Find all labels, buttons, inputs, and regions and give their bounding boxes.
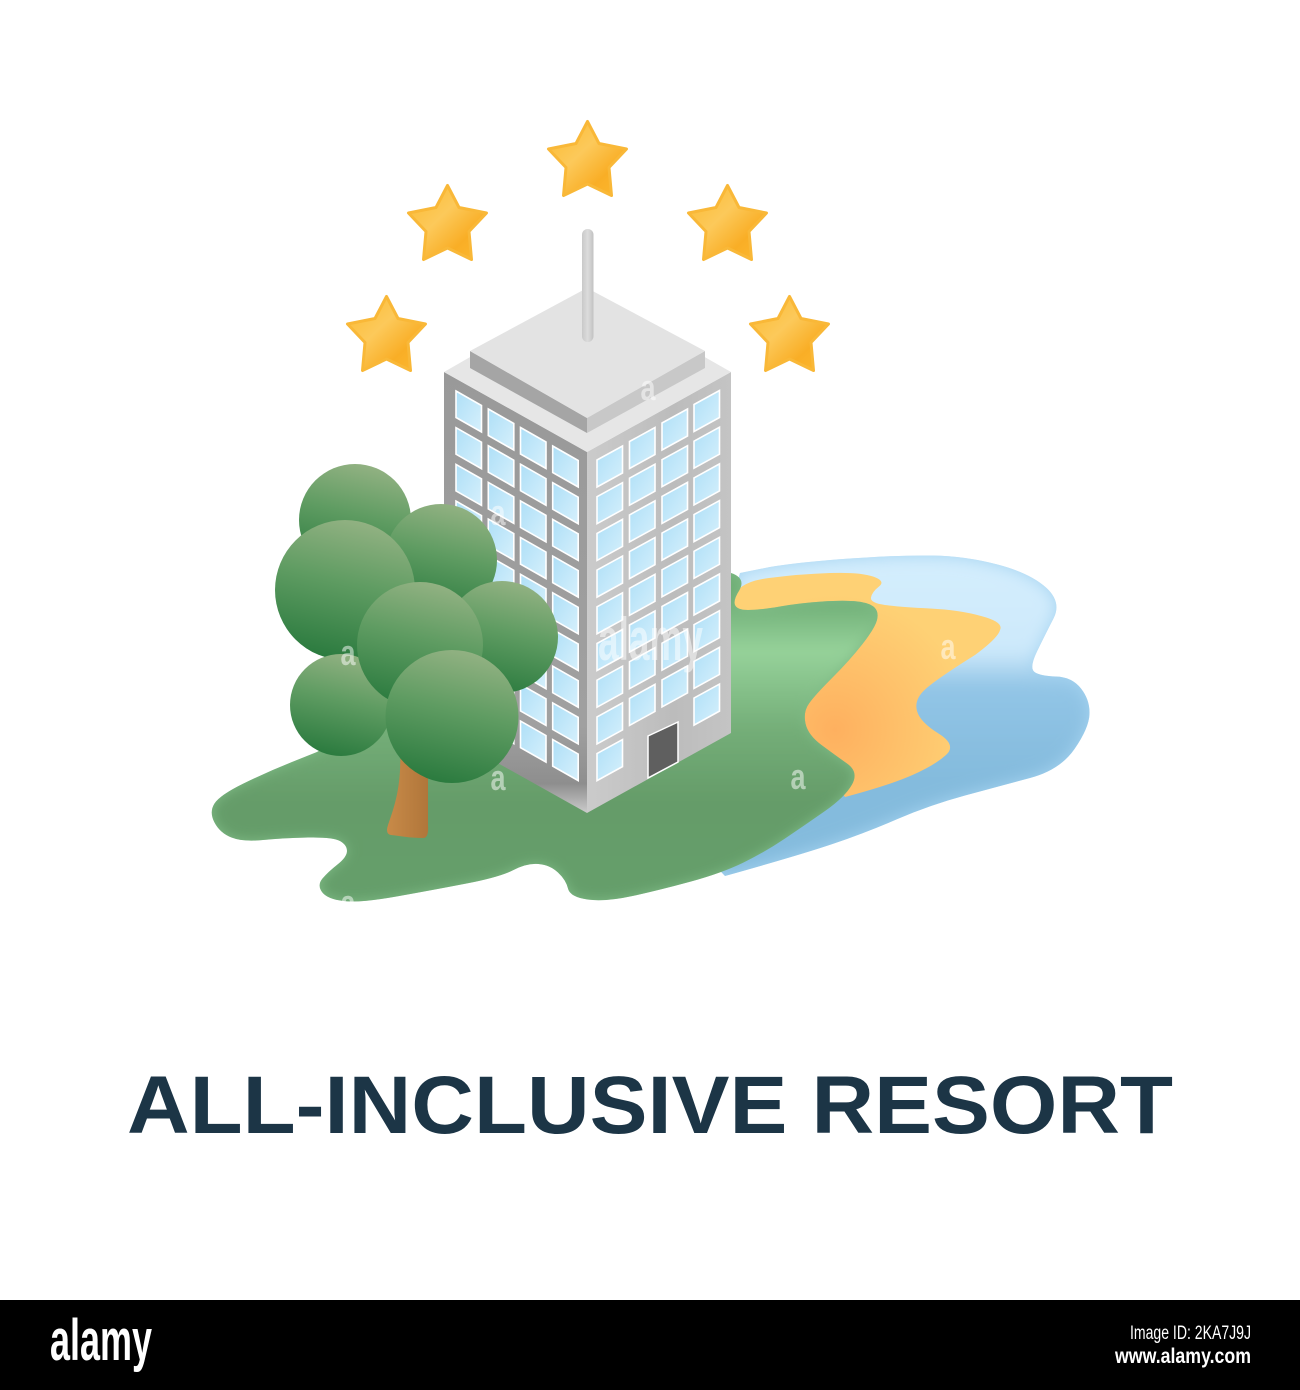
roof block (470, 288, 705, 433)
left windows (456, 391, 578, 781)
foliage (275, 464, 558, 783)
roof (444, 290, 731, 452)
green island (212, 573, 878, 901)
footer logo: alamy (50, 1308, 152, 1373)
title: ALL-INCLUSIVE RESORT (127, 1060, 1173, 1151)
water (700, 555, 1090, 876)
watermarks (340, 367, 956, 923)
building (444, 229, 731, 813)
tree (275, 464, 558, 838)
website: www.alamy.com (1114, 1345, 1251, 1368)
watermarks: a (490, 492, 506, 533)
right face (587, 372, 731, 813)
footer bar (0, 1300, 1300, 1390)
watermarks: a (340, 632, 356, 673)
watermarks: a (340, 882, 356, 923)
star upper right (688, 186, 766, 260)
antenna (582, 229, 594, 342)
image id: Image ID: 2KA7J9J (1130, 1323, 1251, 1344)
door (648, 722, 678, 778)
trunk (387, 745, 428, 838)
star lower right (750, 296, 828, 370)
sand beach (733, 573, 1001, 797)
right windows (597, 390, 720, 781)
left face (444, 372, 587, 813)
illustration: all-inclusive resort (212, 122, 1090, 901)
star upper left (408, 186, 486, 260)
watermarks: a (940, 626, 956, 667)
star top (548, 122, 626, 196)
watermarks: a (790, 756, 806, 797)
watermarks: alamy (598, 606, 703, 673)
watermarks: a (640, 367, 656, 408)
star lower left (348, 296, 426, 370)
stars (348, 122, 828, 370)
watermarks: a (490, 757, 506, 798)
